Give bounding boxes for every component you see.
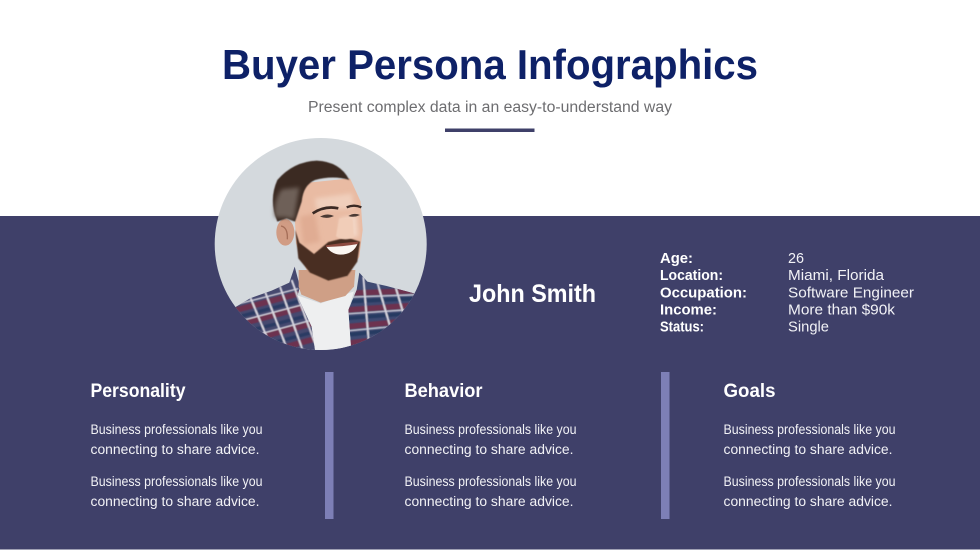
panel: behavior (404, 381, 576, 509)
panel: goals: connecting to share advice. (724, 494, 892, 509)
persona details (660, 250, 914, 336)
ear (276, 219, 294, 246)
persona details: More than $90k (788, 302, 896, 318)
panel: goals: Goals (724, 381, 776, 402)
title underline (445, 128, 534, 132)
persona details: Age: (660, 251, 693, 267)
persona details: Income: (660, 302, 717, 318)
persona details: Single (788, 318, 829, 336)
panel: personality (90, 381, 262, 509)
divider bar left (325, 372, 334, 519)
panel: behavior: Business professionals like you (404, 474, 576, 489)
persona details: Miami, Florida (788, 267, 885, 284)
nose (336, 218, 354, 239)
panel: navy background band (0, 216, 980, 550)
shirt left (236, 266, 315, 350)
portrait photo (214, 138, 427, 360)
beard (295, 230, 360, 281)
divider bar right (661, 372, 670, 519)
face (294, 178, 363, 279)
panel: goals: Business professionals like you (724, 422, 896, 437)
t-shirt (298, 292, 354, 350)
brows (313, 208, 338, 213)
panel: goals: connecting to share advice. (724, 442, 892, 457)
persona details: Occupation: (660, 286, 747, 302)
panel: behavior: Business professionals like you (404, 422, 576, 437)
panel: goals (724, 381, 896, 509)
persona details: 26 (788, 250, 804, 267)
panel: personality: Business professionals like you (90, 422, 262, 437)
eyes (320, 214, 334, 218)
neck (299, 270, 355, 303)
panel: personality: connecting to share advice. (90, 494, 260, 509)
persona details: Status: (660, 320, 704, 336)
name: John Smith (469, 280, 596, 308)
mouth (326, 244, 358, 255)
panel: behavior: Behavior (404, 381, 483, 402)
panel: behavior: connecting to share advice. (404, 494, 574, 509)
panel: personality: connecting to share advice. (90, 442, 260, 457)
persona details: Location: (660, 268, 723, 284)
shirt right (348, 272, 414, 346)
subtitle: Present complex data in an easy-to-understand way (308, 99, 672, 116)
panel: personality: Business professionals like you (90, 474, 262, 489)
panel: behavior: connecting to share advice. (404, 442, 574, 457)
persona details: Software Engineer (788, 284, 914, 302)
panel: personality: Personality (90, 381, 186, 402)
title: Buyer Persona Infographics (222, 41, 758, 88)
hair (273, 161, 349, 222)
panel: goals: Business professionals like you (724, 474, 896, 489)
